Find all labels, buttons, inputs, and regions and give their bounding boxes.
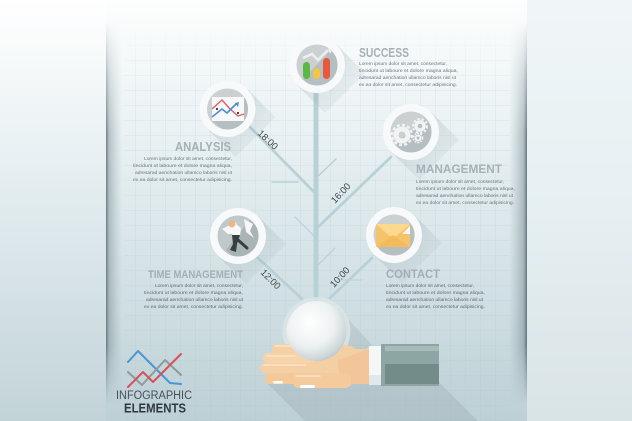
text block: success: adresarad aenchation ullamco laboris nisl ut (359, 75, 457, 81)
icon: bar chart (303, 48, 333, 79)
text block: contact: adresarad aenchation ullamco laboris nisl ut (386, 297, 484, 303)
icon: gears (392, 119, 427, 145)
node: analysis (200, 81, 276, 157)
heading: time management: TIME MANAGEMENT (148, 269, 243, 281)
hand palm (296, 345, 369, 388)
sphere cast shadow (295, 308, 372, 372)
node: contact (366, 207, 442, 283)
text block: time management: tincidunt ut laboure et dolore magna aliqua, (144, 290, 243, 296)
text block: management (416, 179, 515, 206)
text block: management: Lorem ipsum dolor sit amet, consectetur, (416, 179, 504, 185)
text block: time management: ex ea dolor sit amet, consectetur adipisicing. (144, 304, 243, 310)
node: success (289, 37, 365, 113)
text block: management: adresarad aenchation ullamco laboris nisl ut (416, 193, 514, 199)
hand long shadow (268, 350, 478, 421)
text block: analysis: adresarad aenchation ullamco laboris nisl ut (135, 170, 233, 176)
text block: time management (144, 283, 244, 310)
label: 16:00: 16:00 (329, 181, 353, 206)
logo chart lines (128, 351, 181, 387)
text block: contact: ex ea dolor sit amet, consectetur adipisicing. (386, 304, 485, 310)
shirt cuff (369, 346, 381, 385)
heading: contact: CONTACT (386, 267, 441, 281)
logo word: elements: ELEMENTS (124, 402, 186, 416)
right sheet shadow (512, 28, 527, 399)
icon: chart sheet (212, 97, 244, 121)
text block: contact (386, 283, 485, 310)
text block: contact: tincidunt ut laboure et dolore magna aliqua, (386, 290, 485, 296)
text block: analysis: tincidunt ut laboure et dolore magna aliqua, (133, 163, 232, 169)
icon: envelope (376, 224, 410, 247)
node: management (383, 104, 459, 180)
text block: management: tincidunt ut laboure et dolore magna aliqua, (416, 186, 515, 192)
fingers (260, 344, 351, 388)
tree trunk and branches (248, 90, 391, 302)
text block: analysis: Lorem ipsum dolor sit amet, consectetur, (144, 156, 232, 162)
logo: infographic elements (116, 351, 192, 416)
background: centre sheet (106, 0, 527, 421)
text block: time management: adresarad aenchation ullamco laboris nisl ut (146, 297, 244, 303)
node: time management (210, 208, 286, 284)
text block: management: ex ea dolor sit amet, consectetur adipisicing. (416, 200, 514, 206)
finger nails (273, 381, 283, 384)
icon: running man (222, 219, 254, 252)
logo word: infographic: INFOGRAPHIC (116, 390, 192, 402)
background: right side panel (527, 0, 632, 421)
jacket sleeve (381, 344, 439, 386)
text block: contact: Lorem ipsum dolor sit amet, consectetur, (386, 283, 474, 289)
label: 12:00: 12:00 (258, 267, 282, 292)
finger highlights (264, 346, 320, 376)
hand holding sphere (260, 297, 439, 388)
text block: time management: Lorem ipsum dolor sit amet, consectetur, (155, 283, 243, 289)
left sheet shadow (106, 28, 120, 399)
heading: analysis: ANALYSIS (175, 140, 231, 154)
label: 10:00: 10:00 (328, 265, 352, 290)
background: left side panel (0, 0, 106, 421)
heading: success: SUCCESS (359, 46, 409, 60)
text block: success: ex ea dolor sit amet, consectetur adipisicing. (359, 82, 457, 88)
sphere halo (282, 297, 350, 365)
text block: success: Lorem ipsum dolor sit amet, consectetur, (359, 61, 447, 67)
sphere (286, 301, 346, 361)
text block: analysis (133, 156, 233, 183)
text block: analysis: ex ea dolor sit amet, consectetur adipisicing. (133, 177, 232, 183)
label: 18:00: 18:00 (255, 128, 280, 152)
text block: success (359, 61, 458, 88)
grid pattern (125, 44, 510, 406)
text block: success: tincidunt ut laboure et dolore magna aliqua, (359, 68, 458, 74)
heading: management: MANAGEMENT (416, 162, 503, 176)
